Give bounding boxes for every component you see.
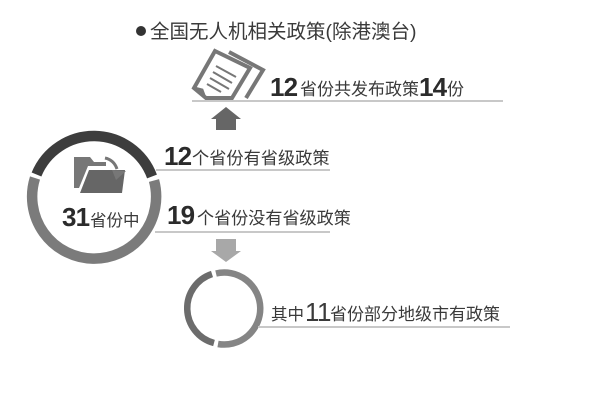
donut: 31 provinces: [32, 136, 156, 259]
heading: 12 provinces published 14 policies: 14: [419, 72, 448, 102]
arrow: down: [211, 239, 241, 262]
arc: 12 provinces with policy: [36, 136, 152, 176]
label: 19 provinces have no policy: [167, 200, 351, 230]
divider: top: [192, 100, 503, 102]
heading: 12 provinces published 14 policies: 12: [270, 72, 298, 102]
label: 11 provinces with city policy: 省份部分地级市有政策: [330, 305, 500, 324]
label: 11 provinces with city policy: [271, 297, 500, 327]
arrow: up: [211, 107, 241, 130]
arc: left segment: [187, 274, 214, 343]
divider: 19 provinces: [155, 231, 330, 233]
heading: 12 provinces published 14 policies: 省份共发布政策: [300, 80, 419, 99]
label: 19 provinces have no policy: 19: [167, 200, 195, 230]
arc: right segment: [216, 273, 260, 345]
label: 11 provinces with city policy: 11: [305, 297, 331, 327]
heading: 12 provinces published 14 policies: [270, 72, 464, 102]
label: 12 provinces have policy: 12: [164, 141, 192, 171]
arc: 19 provinces without policy: [32, 178, 156, 259]
divider: bottom: [258, 326, 510, 328]
label: 19 provinces have no policy: 个省份没有省级政策: [197, 209, 351, 228]
title: 全国无人机相关政策(除港澳台): [150, 21, 416, 43]
label: 12 provinces have policy: [164, 141, 330, 171]
small donut: 11 provinces: [187, 273, 260, 345]
donut label: 31 provinces: 省份中: [90, 211, 140, 230]
label: 11 provinces with city policy: 其中: [271, 305, 304, 324]
heading: 12 provinces published 14 policies: 份: [447, 80, 464, 99]
donut label: 31 provinces: 31: [62, 202, 90, 232]
divider: 12 provinces: [156, 169, 330, 171]
icon: policy documents: [194, 51, 263, 98]
donut label: 31 provinces: [62, 202, 140, 232]
icon: folder with arrow: [74, 157, 126, 193]
label: 12 provinces have policy: 个省份有省级政策: [192, 148, 330, 168]
